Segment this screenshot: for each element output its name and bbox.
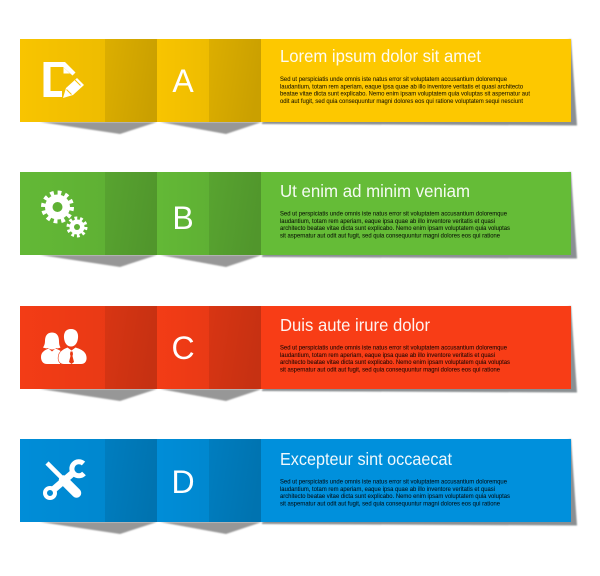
body text D: laudantium, totam rem aperiam, eaque ipsa quae ab illo inventore veritatis et quasi xyxy=(280,486,495,493)
band D xyxy=(20,439,571,522)
edge shadow C xyxy=(262,306,577,392)
body text D xyxy=(280,478,510,507)
icon: document with pencil xyxy=(44,62,84,98)
panel: B xyxy=(20,172,577,267)
body text A xyxy=(280,76,530,105)
icon: wrench and screwdriver xyxy=(45,462,84,498)
body text C: architecto beatae vitae dicta sunt explicabo. Nemo enim ipsam voluptatem quia voluptas xyxy=(280,359,510,366)
edge shadow A xyxy=(262,39,577,126)
body text C: Sed ut perspiciatis unde omnis iste natus error sit voluptatem accusantium doloremque xyxy=(280,344,507,352)
body text D: sit aspernatur aut odit aut fugit, sed quia consequuntur magni dolores eos qui ratione xyxy=(280,500,500,507)
fold panels D xyxy=(20,439,261,522)
panel: C xyxy=(20,306,577,401)
body text C xyxy=(280,344,510,373)
fold shadow B xyxy=(40,255,262,267)
body text A: laudantium, totam rem aperiam, eaque ipsa quae ab illo inventore veritatis et quasi architecto xyxy=(280,83,523,90)
heading D: Excepteur sint occaecat xyxy=(280,449,452,469)
body text B: architecto beatae vitae dicta sunt explicabo. Nemo enim ipsam voluptatem quia voluptas xyxy=(280,225,510,232)
body text B: sit aspernatur aut odit aut fugit, sed quia consequuntur magni dolores eos qui ratione xyxy=(280,232,500,239)
body text B: laudantium, totam rem aperiam, eaque ipsa quae ab illo inventore veritatis et quasi xyxy=(280,218,495,225)
band C xyxy=(20,306,571,389)
icon: gears xyxy=(44,193,86,236)
edge shadow D xyxy=(262,439,577,526)
body text D: Sed ut perspiciatis unde omnis iste natus error sit voluptatem accusantium doloremque xyxy=(280,478,507,486)
letter C: C xyxy=(171,330,195,366)
body text A: Sed ut perspiciatis unde omnis iste natus error sit voluptatem accusantium doloremque xyxy=(280,76,507,83)
fold panels A xyxy=(20,39,261,122)
body text B xyxy=(280,210,510,239)
body text C: laudantium, totam rem aperiam, eaque ipsa quae ab illo inventore veritatis et quasi xyxy=(280,352,495,359)
heading C: Duis aute irure dolor xyxy=(280,315,430,335)
heading A: Lorem ipsum dolor sit amet xyxy=(280,46,481,66)
fold shadow A xyxy=(40,122,262,134)
body text C: sit aspernatur aut odit aut fugit, sed quia consequuntur magni dolores eos qui ratione xyxy=(280,366,500,373)
edge shadow B xyxy=(262,172,577,258)
letter D: D xyxy=(171,464,195,500)
body text A: beatae vitae dicta sunt explicabo. Nemo enim ipsam voluptatem quia voluptas sit aspernatur aut xyxy=(280,91,530,98)
heading B: Ut enim ad minim veniam xyxy=(280,181,470,201)
letter B: B xyxy=(172,200,194,236)
body text A: odit aut fugit, sed quia consequuntur magni dolores eos qui ratione voluptatem sequi nesciunt xyxy=(280,98,523,105)
fold panels B xyxy=(20,172,261,255)
letter A: A xyxy=(172,63,194,99)
body text D: architecto beatae vitae dicta sunt explicabo. Nemo enim ipsam voluptatem quia voluptas xyxy=(280,493,510,500)
fold shadow C xyxy=(40,389,262,401)
body text B: Sed ut perspiciatis unde omnis iste natus error sit voluptatem accusantium doloremque xyxy=(280,210,507,218)
band B xyxy=(20,172,571,255)
panel: D xyxy=(20,439,577,534)
band A xyxy=(20,39,571,122)
panel: A xyxy=(20,39,577,134)
icon: business people xyxy=(41,329,87,364)
fold shadow D xyxy=(40,522,262,534)
fold panels C xyxy=(20,306,261,389)
